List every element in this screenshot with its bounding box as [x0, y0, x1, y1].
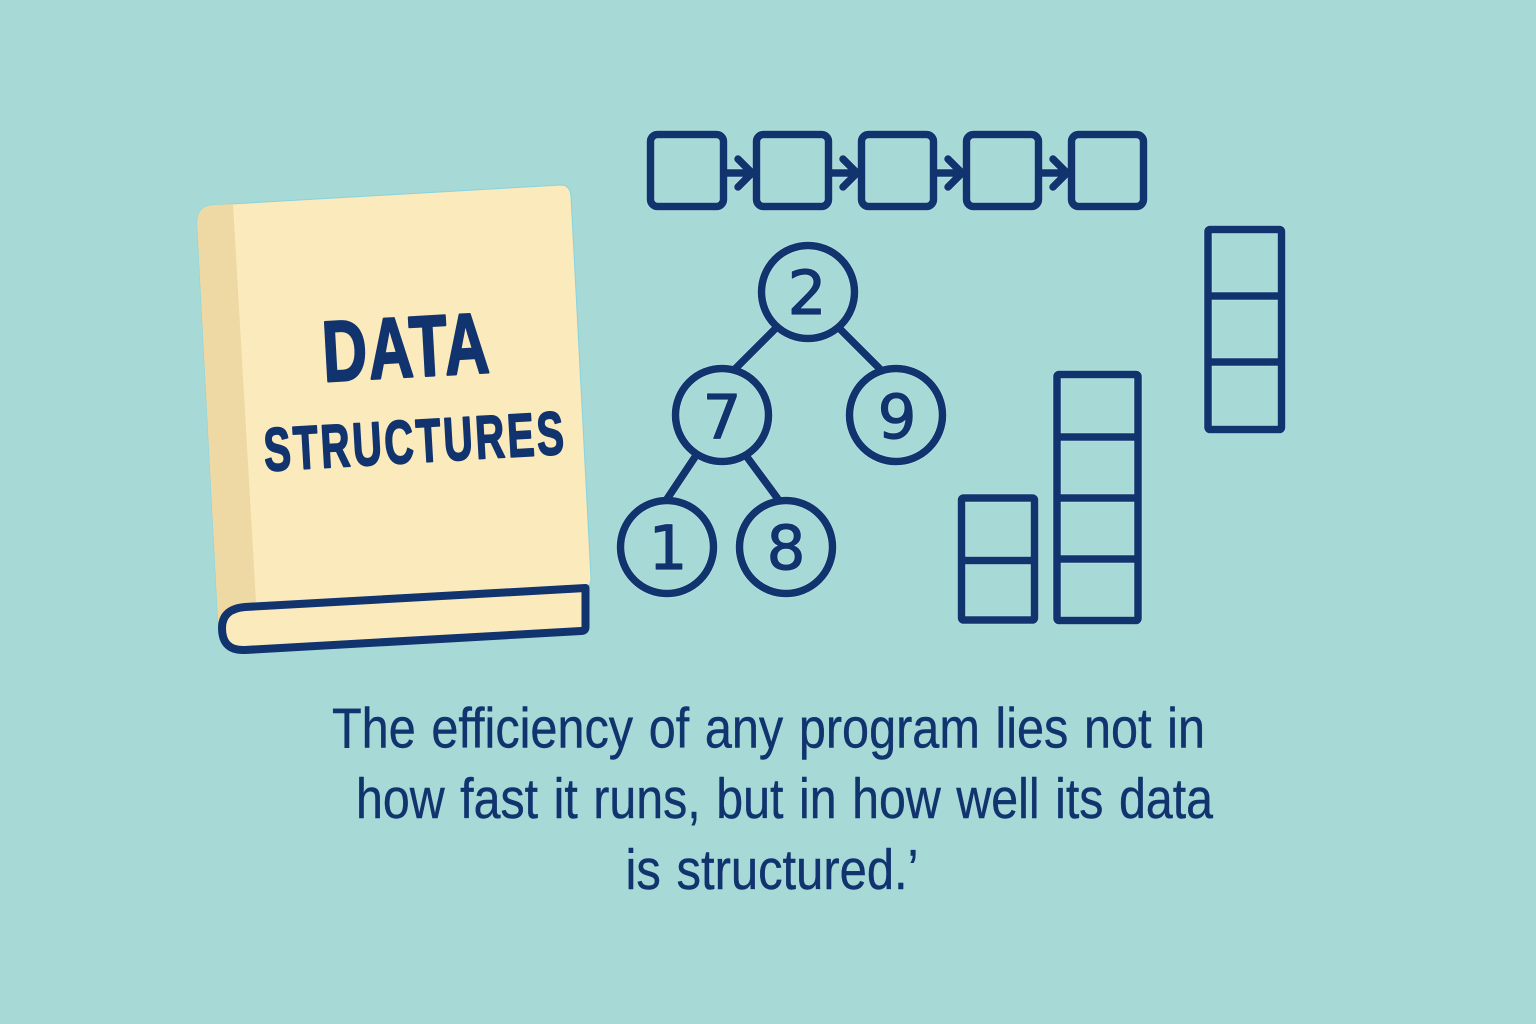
short stack diagram [962, 498, 1034, 620]
book title: DATA [320, 295, 493, 400]
quote text: The efficiency of any program lies not in [332, 696, 1205, 760]
tree node values: 8 [767, 513, 805, 584]
book title: STRUCTURES [262, 399, 568, 484]
tree node values: 7 [703, 382, 741, 453]
quote text: is structured.’ [626, 838, 918, 902]
tree node values: 1 [649, 513, 687, 584]
tree node values: 9 [878, 382, 916, 453]
tree node values: 2 [788, 258, 826, 329]
tree node values [649, 258, 916, 584]
vertical array diagram [1208, 230, 1282, 430]
book title [262, 295, 568, 484]
linked list diagram [650, 134, 1144, 206]
binary tree diagram [620, 246, 942, 594]
tall stack diagram [1057, 374, 1138, 620]
quote text: how fast it runs, but in how well its data [356, 767, 1213, 831]
quote text [332, 696, 1213, 902]
icon: book [197, 185, 591, 650]
